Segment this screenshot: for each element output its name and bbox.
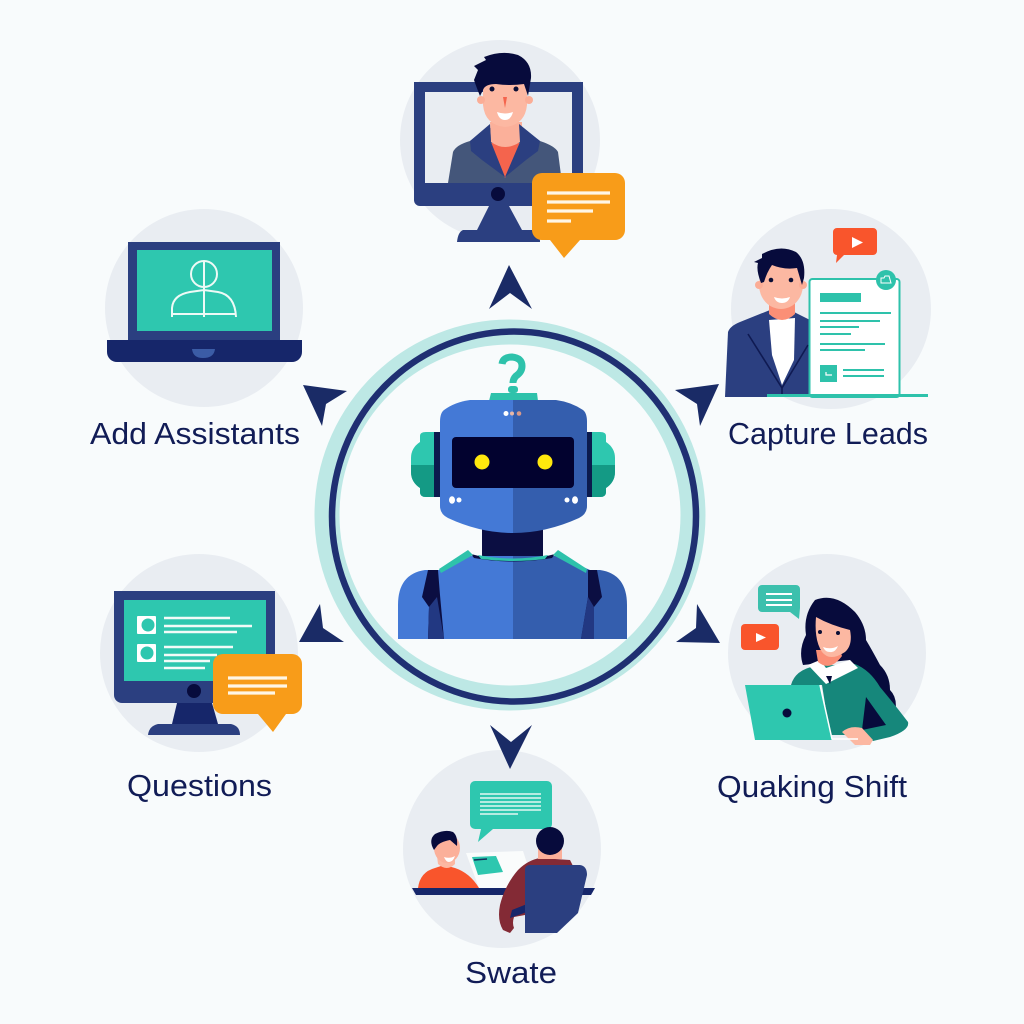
panel: questions <box>100 554 302 803</box>
person: woman with laptop <box>791 598 908 745</box>
icon: resume document <box>767 270 928 397</box>
icon: video button <box>741 624 779 650</box>
person: right <box>499 827 575 933</box>
icon: teal chat bubble <box>758 585 800 619</box>
arrow: up-left <box>303 385 347 426</box>
panel: top video call <box>400 40 625 258</box>
person: left <box>418 831 479 888</box>
icon: central robot <box>398 357 627 639</box>
person: man on screen <box>448 53 562 183</box>
panel: add assistants <box>90 209 303 451</box>
icon: monitor <box>414 82 583 242</box>
arrow: down-left <box>299 604 344 642</box>
icon: laptop <box>745 685 858 740</box>
label: Add Assistants: Add Assistants <box>90 416 300 451</box>
icon: paper on table <box>466 851 535 888</box>
person: man with document <box>725 248 810 397</box>
robot torso <box>398 550 627 639</box>
label: Questions: Questions <box>127 768 272 803</box>
arrow: up-right <box>675 384 719 426</box>
arrow: down-right <box>676 604 720 643</box>
robot neck <box>482 520 543 558</box>
icon: desktop monitor <box>114 591 275 735</box>
ring: inner navy <box>332 332 696 702</box>
label: Quaking Shift: Quaking Shift <box>717 769 907 804</box>
icon: orange chat bubble <box>213 654 302 732</box>
icon: orange chat bubble <box>532 173 625 258</box>
table <box>412 888 595 895</box>
robot head <box>440 400 587 533</box>
icon: teal speech bubble <box>470 781 552 842</box>
label: Capture Leads: Capture Leads <box>728 416 928 451</box>
label: Swate: Swate <box>465 955 557 990</box>
robot headphones <box>411 432 615 497</box>
icon: video bubble <box>833 228 877 263</box>
question mark antenna <box>489 357 538 401</box>
panel: quaking shift <box>717 554 926 804</box>
chair <box>525 865 587 933</box>
panel: swate meeting <box>403 750 601 990</box>
arrow: up <box>489 265 532 309</box>
arrow: down <box>490 725 532 769</box>
ring: outer pale teal <box>327 332 693 698</box>
panel: capture leads <box>725 209 931 451</box>
icon: laptop <box>107 242 302 362</box>
